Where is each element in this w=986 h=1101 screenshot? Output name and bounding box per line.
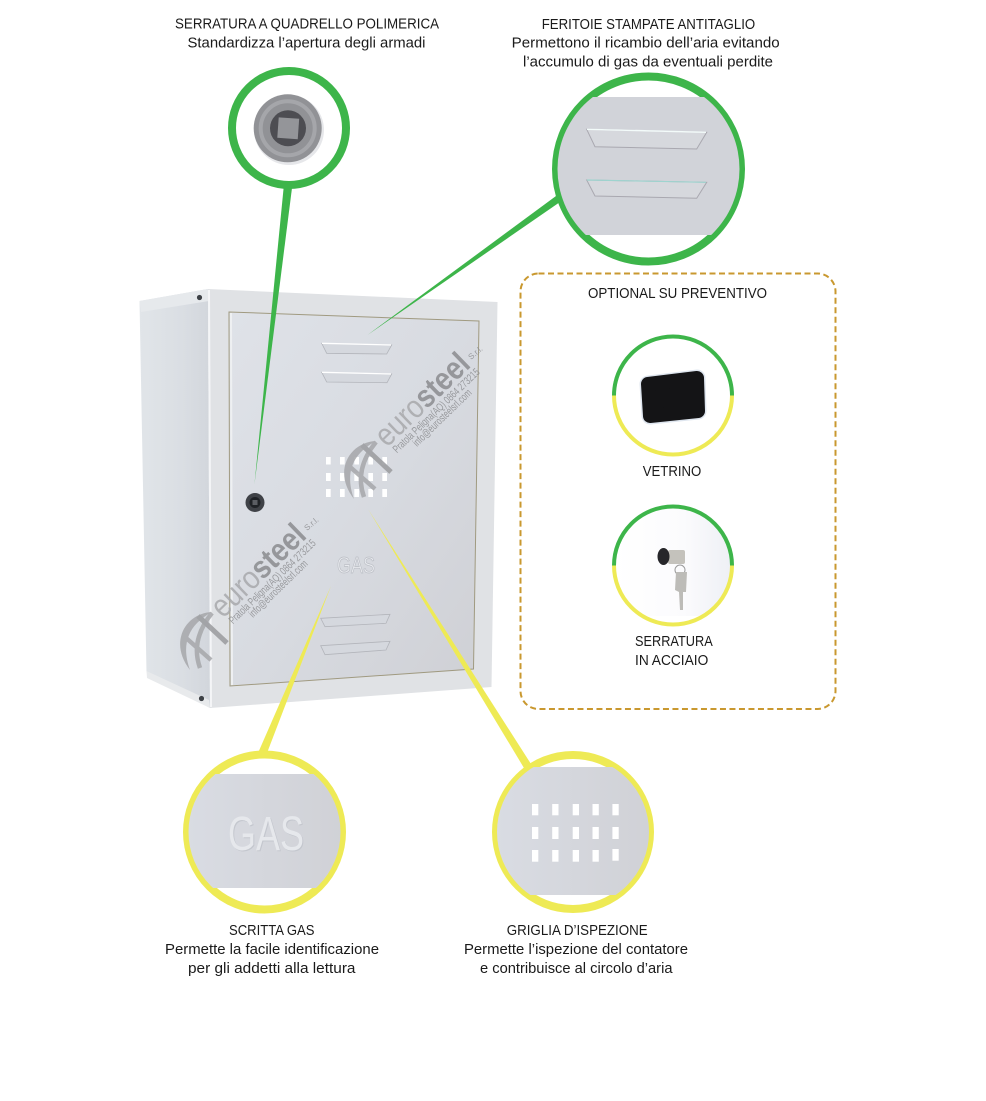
window label: VETRINO (643, 464, 701, 480)
upper logo globe (344, 441, 391, 499)
heading: louvres: FERITOIE STAMPATE ANTITAGLIO (542, 17, 755, 33)
heading: lock (175, 16, 439, 52)
callout pointer: lock (254, 184, 292, 484)
door top louvres (322, 343, 392, 383)
cabinet screws (197, 295, 204, 701)
cabinet front frame (208, 289, 498, 708)
heading: inspection grid (464, 923, 688, 977)
callout pointer: louvres (368, 196, 560, 335)
lower logo globe (180, 612, 227, 670)
upper logo suffix: S.r.l. (467, 344, 485, 362)
heading: GAS label: Permette la facile identificazione (165, 942, 379, 958)
steel lock label: IN ACCIAIO (635, 653, 708, 669)
upper logo email: info@eurosteelsrl.com (411, 387, 474, 449)
heading: inspection grid: GRIGLIA D’ISPEZIONE (507, 923, 648, 939)
callout pointer: GAS label (258, 586, 331, 753)
lower logo email: info@eurosteelsrl.com (247, 558, 310, 620)
louvres photo (555, 97, 745, 235)
GAS label photo: GAS (229, 809, 305, 862)
key photo (658, 516, 730, 615)
heading: lock: Standardizza l’apertura degli armadi (188, 36, 426, 52)
heading: louvres (512, 17, 780, 71)
panel heading: OPTIONAL SU PREVENTIVO (588, 286, 767, 302)
window icon (648, 378, 698, 416)
callout: louvres (555, 76, 745, 262)
heading: louvres: l’accumulo di gas da eventuali perdite (523, 55, 773, 71)
cabinet door (229, 312, 479, 686)
callout: quadrello lock (232, 71, 346, 185)
panel: optional extras (520, 274, 836, 709)
door lock (246, 493, 264, 512)
upper logo address: Pratola Peligna(AQ) 0864 273215 (391, 366, 483, 456)
panel dashed border (520, 274, 836, 709)
cabinet (140, 289, 498, 708)
heading: GAS label: per gli addetti alla lettura (188, 961, 356, 977)
heading: lock: SERRATURA A QUADRELLO POLIMERICA (175, 16, 439, 32)
heading: GAS label (165, 923, 379, 977)
option: steel lock (614, 506, 732, 669)
watermark: upper eurosteel logo (344, 344, 485, 499)
GAS label photo (185, 774, 345, 888)
window ring (614, 336, 732, 454)
GAS label photo: GAS (228, 808, 304, 861)
watermark: lower eurosteel logo (180, 515, 321, 670)
lock photo (254, 94, 324, 165)
callout pointer: grid (368, 509, 531, 768)
cabinet side face (140, 289, 210, 708)
door GAS embossing: GAS (337, 552, 375, 578)
option: window (614, 336, 732, 480)
lower logo wordmark: eurosteel (203, 516, 313, 624)
lower logo address: Pratola Peligna(AQ) 0864 273215 (227, 537, 319, 627)
door inspection grid (326, 457, 387, 497)
callout: inspection grid (493, 755, 653, 909)
steel lock ring (614, 506, 732, 624)
steel lock label (635, 634, 713, 669)
door bottom louvres (321, 614, 390, 655)
inspection grid photo (493, 767, 653, 895)
lower logo suffix: S.r.l. (303, 515, 321, 533)
steel lock label: SERRATURA (635, 634, 713, 650)
heading: inspection grid: Permette l’ispezione del contatore (464, 942, 688, 958)
heading: GAS label: SCRITTA GAS (229, 923, 314, 939)
heading: louvres: Permettono il ricambio dell’aria evitando (512, 36, 780, 52)
callout: GAS label (185, 754, 345, 910)
heading: inspection grid: e contribuisce al circolo d’aria (480, 961, 673, 977)
upper logo wordmark: eurosteel (367, 345, 477, 453)
